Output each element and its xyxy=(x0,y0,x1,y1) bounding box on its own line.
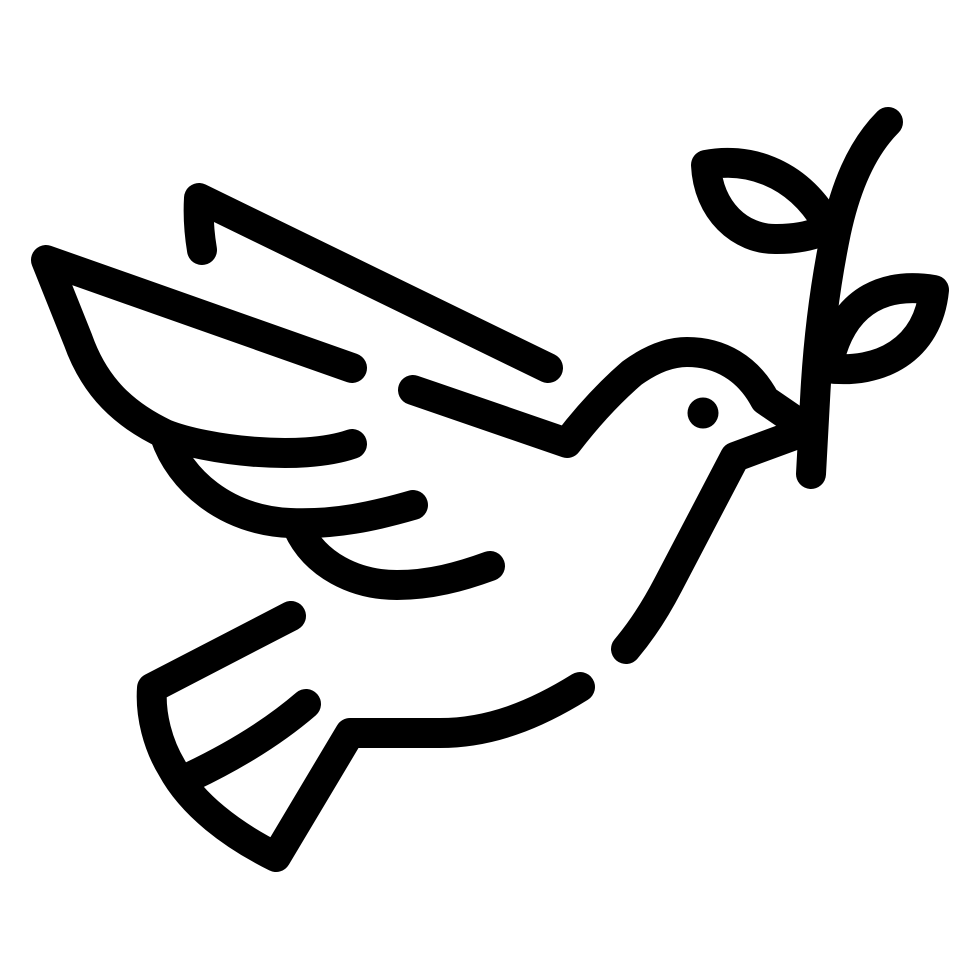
eye xyxy=(688,398,718,428)
tail feather xyxy=(190,704,306,777)
bird back and head xyxy=(413,352,800,443)
beak and breast line xyxy=(626,433,800,649)
upper back wing stroke xyxy=(199,198,548,368)
olive branch stem xyxy=(811,122,888,474)
upper leaf xyxy=(706,163,826,239)
belly to tail xyxy=(152,616,580,857)
front wing outline xyxy=(46,260,352,453)
second wing feather xyxy=(165,436,413,523)
third wing feather xyxy=(298,528,490,585)
lower leaf xyxy=(826,288,934,369)
